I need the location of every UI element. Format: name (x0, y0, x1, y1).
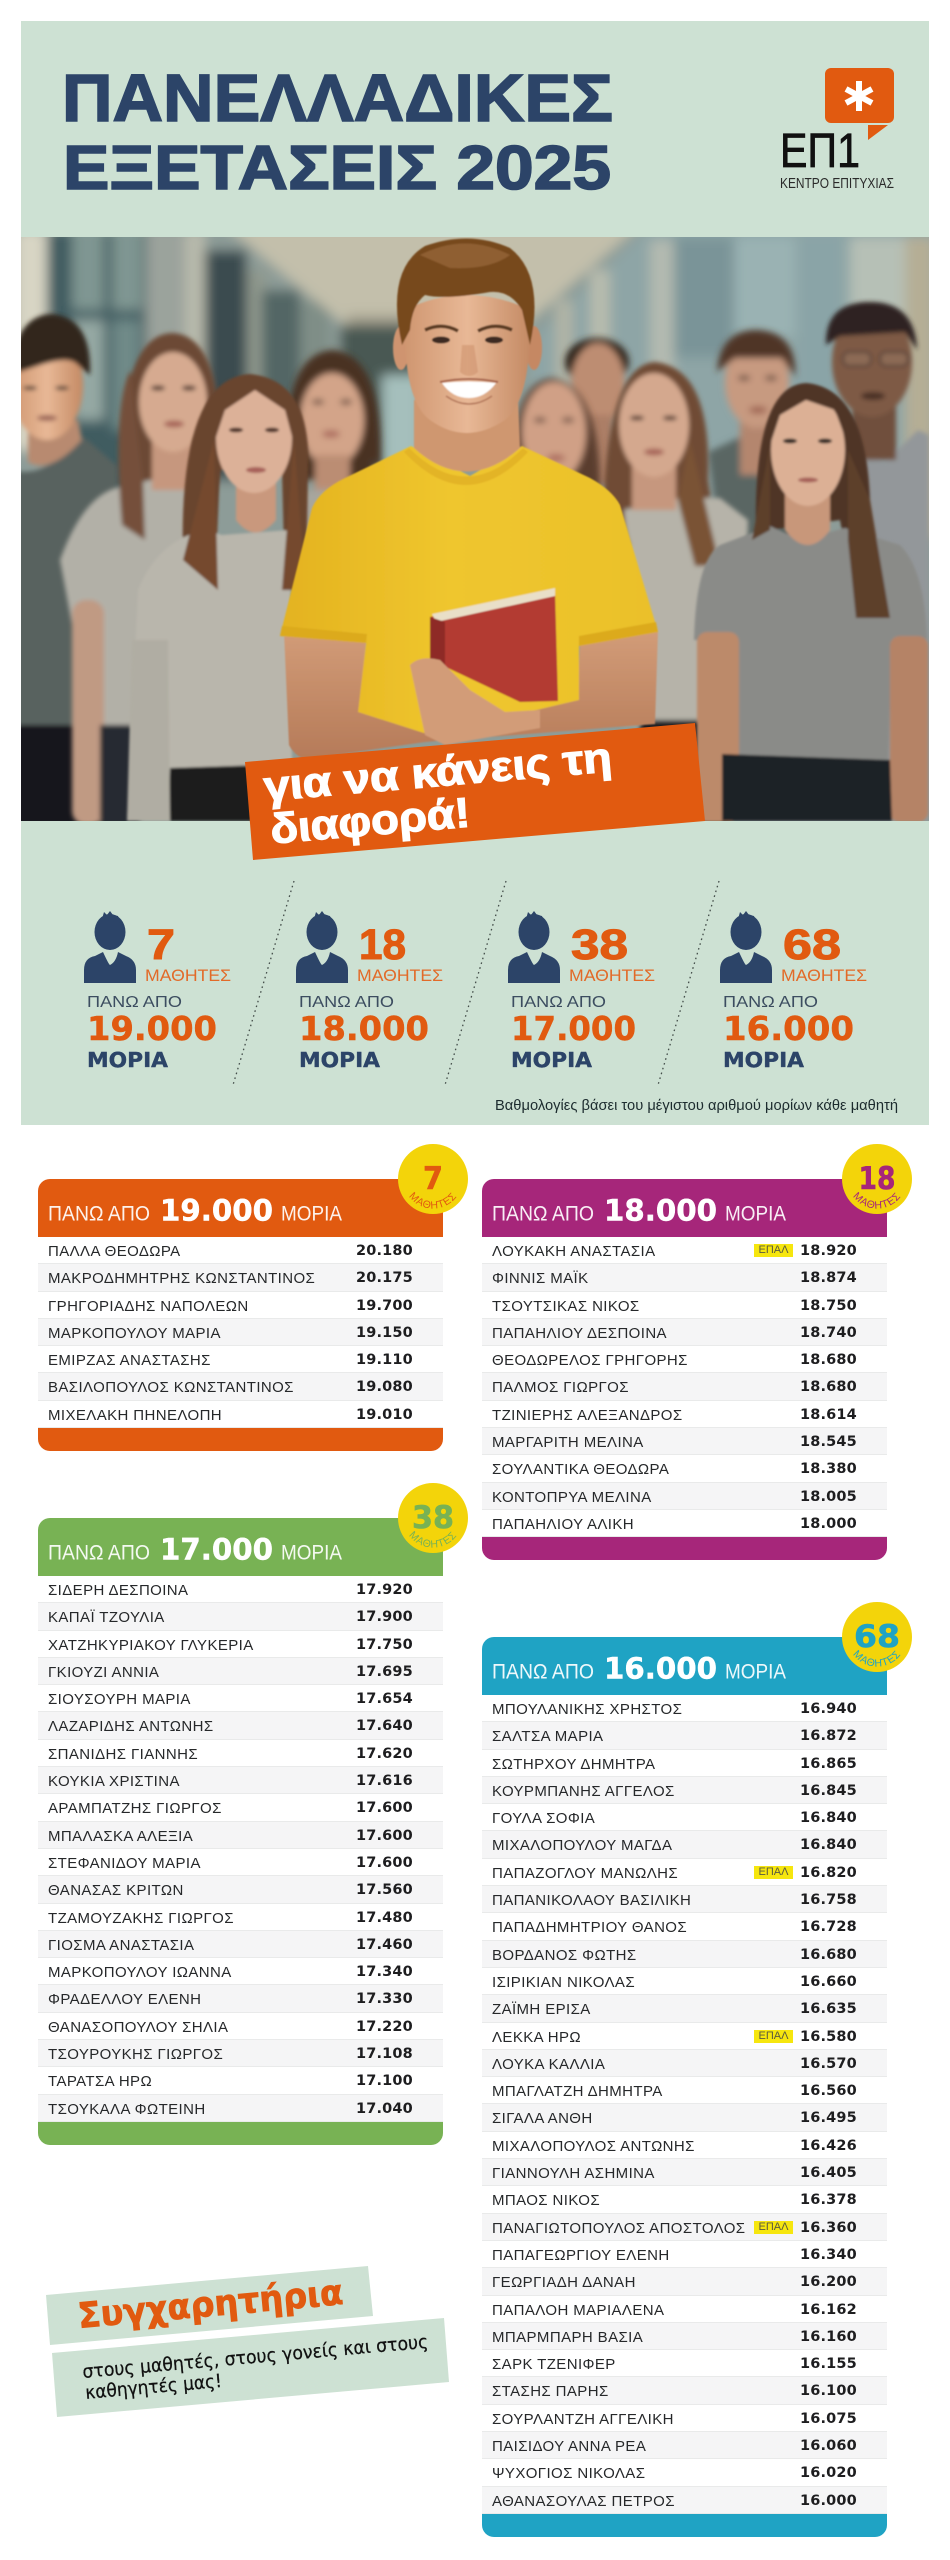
logo: ΕΠ1 Κέντρο Επιτυχίας: ΕΠ1 (780, 125, 860, 178)
stat: 18 students over 18.000: ΠΑΝΩ ΑΠΟ (299, 994, 394, 1011)
table rows: ΑΡΑΜΠΑΤΖΗΣ ΓΙΩΡΓΟΣ (48, 1800, 222, 1817)
table rows: ΜΠΑΓΛΑΤΖΗ ΔΗΜΗΤΡΑ (492, 2083, 663, 2100)
table rows: 17.640 (356, 1718, 413, 1734)
red book (430, 592, 558, 702)
table header (482, 1179, 887, 1237)
table rows: ΜΑΡΓΑΡΙΤΗ ΜΕΛΙΝΑ (492, 1434, 644, 1451)
stat: 18 students over 18.000 (296, 911, 443, 1072)
background student: boy behind right (565, 338, 629, 485)
table rows: 17.600 (356, 1828, 413, 1844)
table rows: ΕΜΙΡΖΑΣ ΑΝΑΣΤΑΣΗΣ (48, 1352, 211, 1369)
photo: students in a school corridor (21, 237, 929, 821)
badge: 7 students: ΜΑΘΗΤΕΣ (409, 1192, 456, 1209)
table rows: ΕΠΑΛ (759, 1244, 788, 1256)
table rows: 17.920 (356, 1582, 413, 1598)
congratulations message (52, 2318, 449, 2417)
smile (442, 382, 496, 398)
badge: 38 students: 38 (412, 1500, 454, 1536)
table rows: 16.340 (800, 2247, 857, 2263)
stat: 38 students over 17.000: 38 (571, 921, 628, 969)
table rows (38, 1582, 443, 2122)
table rows: 18.680 (800, 1379, 857, 1395)
background student: girl behind left (287, 350, 380, 530)
badge: 18 students: ΜΑΘΗΤΕΣ (853, 1192, 900, 1209)
table rows: ΙΣΙΡΙΚΙΑΝ ΝΙΚΟΛΑΣ (492, 1974, 635, 1991)
table rows: ΓΟΥΛΑ ΣΟΦΙΑ (492, 1810, 595, 1827)
table header: ΜΟΡΙΑ (281, 1542, 342, 1564)
congratulations message: στους μαθητές, στους γονείς και στους (82, 2332, 429, 2383)
badge: 18 students: 18 (858, 1161, 896, 1197)
stat: 7 students over 19.000 (84, 911, 231, 1072)
table rows: 16.872 (800, 1728, 857, 1744)
table rows: 17.560 (356, 1882, 413, 1898)
table rows: 16.160 (800, 2329, 857, 2345)
table rows: ΠΑΛΛΑ ΘΕΟΔΩΡΑ (48, 1243, 181, 1260)
stat: 7 students over 19.000: 7 (147, 921, 175, 969)
table rows: 18.380 (800, 1461, 857, 1477)
table rows: ΓΡΗΓΟΡΙΑΔΗΣ ΝΑΠΟΛΕΩΝ (48, 1298, 249, 1315)
table rows: ΓΙΟΣΜΑ ΑΝΑΣΤΑΣΙΑ (48, 1937, 194, 1954)
background student: boy with glasses (826, 302, 929, 821)
table rows: ΕΠΑΛ (759, 2221, 788, 2233)
table rows: 18.740 (800, 1325, 857, 1341)
table rows: ΠΑΠΑΝΙΚΟΛΑΟΥ ΒΑΣΙΛΙΚΗ (492, 1892, 691, 1909)
table rows: 16.940 (800, 1701, 857, 1717)
badge: 68 students: ΜΑΘΗΤΕΣ (853, 1650, 900, 1667)
corridor background (0, 220, 950, 840)
table rows: ΨΥΧΟΓΙΟΣ ΝΙΚΟΛΑΣ (492, 2465, 645, 2482)
table rows: ΒΟΡΔΑΝΟΣ ΦΩΤΗΣ (492, 1947, 637, 1964)
table rows: 16.378 (800, 2192, 857, 2208)
table header (38, 1518, 443, 1576)
table rows: ΦΡΑΔΕΛΛΟΥ ΕΛΕΝΗ (48, 1991, 201, 2008)
stat: 7 students over 19.000: 19.000 (87, 1009, 217, 1048)
table rows: 16.060 (800, 2438, 857, 2454)
banner: για να κάνεις τη διαφορά! (245, 723, 705, 860)
banner: για να κάνεις τη διαφορά!: για να κάνεις τη (262, 733, 613, 810)
table rows: ΖΑΪΜΗ ΕΡΙΣΑ (492, 2001, 591, 2018)
background student: girl in the front right (694, 383, 928, 822)
stat: 18 students over 18.000: ΜΑΘΗΤΕΣ (357, 967, 443, 985)
table rows: 16.570 (800, 2056, 857, 2072)
table rows: 18.000 (800, 1516, 857, 1532)
table rows: 16.360 (800, 2220, 857, 2236)
table rows: ΣΤΕΦΑΝΙΔΟΥ ΜΑΡΙΑ (48, 1855, 201, 1872)
stat: 68 students over 16.000: ΜΟΡΙΑ (723, 1048, 804, 1072)
table rows: ΠΑΙΣΙΔΟΥ ΑΝΝΑ ΡΕΑ (492, 2438, 646, 2455)
background student: girl left (60, 333, 220, 825)
stats row (84, 880, 898, 1114)
table rows: 16.162 (800, 2302, 857, 2318)
panel: stats background (21, 821, 929, 1125)
table rows: 16.635 (800, 2001, 857, 2017)
arms (284, 630, 658, 759)
table header: 17.000 (160, 1532, 273, 1566)
table rows: ΛΕΚΚΑ ΗΡΩ (492, 2029, 581, 2046)
table rows: ΜΑΡΚΟΠΟΥΛΟΥ ΙΩΑΝΝΑ (48, 1964, 232, 1981)
table header: ΠΑΝΩ ΑΠΟ (492, 1202, 594, 1226)
main student: boy in yellow shirt holding a red book (280, 238, 658, 759)
table rows: ΠΑΛΜΟΣ ΓΙΩΡΓΟΣ (492, 1379, 629, 1396)
table rows: ΣΙΔΕΡΗ ΔΕΣΠΟΙΝΑ (48, 1582, 188, 1599)
table rows: ΚΟΝΤΟΠΡΥΑ ΜΕΛΙΝΑ (492, 1489, 652, 1506)
table rows: ΚΟΥΡΜΠΑΝΗΣ ΑΓΓΕΛΟΣ (492, 1783, 675, 1800)
stat: 38 students over 17.000: 17.000 (511, 1009, 636, 1048)
face (405, 295, 530, 433)
table rows: 16.865 (800, 1756, 857, 1772)
table rows: ΠΑΠΑΗΛΙΟΥ ΑΛΙΚΗ (492, 1516, 634, 1533)
stat: 68 students over 16.000: 16.000 (723, 1009, 854, 1048)
badge: 68 students: 68 (854, 1619, 900, 1655)
badge: 38 students: ΜΑΘΗΤΕΣ (409, 1530, 456, 1548)
table rows: ΦΙΝΝΙΣ ΜΑΪΚ (492, 1270, 588, 1287)
stat: 68 students over 16.000 (720, 911, 867, 1072)
table rows: ΤΖΙΝΙΕΡΗΣ ΑΛΕΞΑΝΔΡΟΣ (492, 1407, 683, 1424)
hand (410, 658, 540, 745)
table rows: ΣΑΛΤΣΑ ΜΑΡΙΑ (492, 1728, 603, 1745)
background student: boy right (708, 330, 812, 545)
eyebrows (425, 326, 458, 331)
stat: 38 students over 17.000: ΜΑΘΗΤΕΣ (569, 967, 655, 985)
table rows: ΜΠΟΥΛΑΝΙΚΗΣ ΧΡΗΣΤΟΣ (492, 1701, 682, 1718)
background student: girl right (603, 362, 748, 830)
table rows: 16.580 (800, 2029, 857, 2045)
stat: 38 students over 17.000: ΜΟΡΙΑ (511, 1048, 592, 1072)
table rows: 17.460 (356, 1937, 413, 1953)
badge: 18 students (842, 1144, 912, 1214)
table rows: ΛΟΥΚΑΚΗ ΑΝΑΣΤΑΣΙΑ (492, 1243, 656, 1260)
table rows: ΠΑΠΑΛΟΗ ΜΑΡΙΑΛΕΝΑ (492, 2302, 664, 2319)
table rows: ΜΠΑΛΑΣΚΑ ΑΛΕΞΙΑ (48, 1828, 193, 1845)
table rows: 17.600 (356, 1855, 413, 1871)
badge: 7 students: 7 (423, 1161, 443, 1197)
table rows: 20.175 (356, 1270, 413, 1286)
table header: ΜΟΡΙΑ (281, 1202, 342, 1226)
eyes (432, 336, 450, 344)
callout: congratulations (46, 2266, 449, 2417)
table header: ΜΟΡΙΑ (725, 1202, 786, 1226)
table rows: ΘΑΝΑΣΟΠΟΥΛΟΥ ΣΗΛΙΑ (48, 2019, 228, 2036)
table header: ΠΑΝΩ ΑΠΟ (492, 1660, 594, 1684)
stat: 38 students over 17.000: ΠΑΝΩ ΑΠΟ (511, 994, 606, 1011)
table rows (482, 1701, 887, 2514)
table rows: 16.840 (800, 1810, 857, 1826)
table rows: 16.680 (800, 1947, 857, 1963)
table rows: ΣΙΓΑΛΑ ΑΝΘΗ (492, 2110, 593, 2127)
table rows: ΤΣΟΥΤΣΙΚΑΣ ΝΙΚΟΣ (492, 1298, 640, 1315)
table rows: ΑΘΑΝΑΣΟΥΛΑΣ ΠΕΤΡΟΣ (492, 2493, 675, 2510)
table rows: ΣΟΥΡΛΑΝΤΖΗ ΑΓΓΕΛΙΚΗ (492, 2411, 674, 2428)
table rows: 19.080 (356, 1379, 413, 1395)
table rows: ΛΑΖΑΡΙΔΗΣ ΑΝΤΩΝΗΣ (48, 1718, 214, 1735)
table header: 16.000 (604, 1652, 717, 1686)
table rows: 16.200 (800, 2274, 857, 2290)
table rows: 18.750 (800, 1298, 857, 1314)
table: over 19.000 points (38, 1144, 468, 1451)
table rows: 17.040 (356, 2101, 413, 2117)
congratulations heading: Συγχαρητήρια (76, 2273, 345, 2337)
table header (482, 1637, 887, 1695)
table rows: 17.340 (356, 1964, 413, 1980)
stat: 18 students over 18.000: 18 (359, 921, 406, 969)
table footer (38, 2122, 443, 2145)
table footer (482, 2514, 887, 2537)
table rows: ΜΙΧΕΛΑΚΗ ΠΗΝΕΛΟΠΗ (48, 1407, 222, 1424)
icon: student (296, 911, 348, 983)
table rows: 16.728 (800, 1919, 857, 1935)
badge: 7 students (398, 1144, 468, 1214)
table: over 18.000 points (482, 1144, 912, 1560)
stat: 68 students over 16.000: ΜΑΘΗΤΕΣ (781, 967, 867, 985)
table rows: 17.616 (356, 1773, 413, 1789)
table header: 19.000 (160, 1194, 273, 1228)
table rows: 17.330 (356, 1991, 413, 2007)
table header: ΠΑΝΩ ΑΠΟ (48, 1202, 150, 1226)
table rows: ΤΣΟΥΚΑΛΑ ΦΩΤΕΙΝΗ (48, 2101, 206, 2118)
stat: 18 students over 18.000: 18.000 (299, 1009, 429, 1048)
icon: student (720, 911, 772, 983)
table rows: ΓΚΙΟΥΖΙ ΑΝΝΙΑ (48, 1664, 159, 1681)
table rows: 16.820 (800, 1865, 857, 1881)
table rows: 19.010 (356, 1407, 413, 1423)
stat: 7 students over 19.000: ΜΑΘΗΤΕΣ (145, 967, 231, 985)
table rows: ΜΙΧΑΛΟΠΟΥΛΟΥ ΜΑΓΔΑ (492, 1837, 672, 1854)
table header (38, 1179, 443, 1237)
table rows: ΠΑΝΑΓΙΩΤΟΠΟΥΛΟΣ ΑΠΟΣΤΟΛΟΣ (492, 2220, 745, 2237)
title: ΕΞΕΤΑΣΕΙΣ 2025 (63, 134, 611, 203)
table rows: ΓΙΑΝΝΟΥΛΗ ΑΣΗΜΙΝΑ (492, 2165, 655, 2182)
table header: ΜΟΡΙΑ (725, 1660, 786, 1684)
table rows: 18.680 (800, 1352, 857, 1368)
table rows: 16.000 (800, 2493, 857, 2509)
table rows: 17.220 (356, 2019, 413, 2035)
table rows: ΛΟΥΚΑ ΚΑΛΛΙΑ (492, 2056, 605, 2073)
table footer (482, 1537, 887, 1560)
table rows: 16.660 (800, 1974, 857, 1990)
icon: student (84, 911, 136, 983)
table rows: 17.750 (356, 1637, 413, 1653)
table rows: 19.110 (356, 1352, 413, 1368)
table rows: ΚΟΥΚΙΑ ΧΡΙΣΤΙΝΑ (48, 1773, 180, 1790)
table: over 17.000 points (38, 1483, 468, 2145)
hair (397, 238, 534, 345)
table rows: ΕΠΑΛ (759, 1866, 788, 1878)
table rows: ΜΑΡΚΟΠΟΥΛΟΥ ΜΑΡΙΑ (48, 1325, 221, 1342)
neck (414, 400, 520, 472)
table rows: 17.600 (356, 1800, 413, 1816)
table rows: 16.845 (800, 1783, 857, 1799)
table rows: 16.426 (800, 2138, 857, 2154)
table rows (482, 1243, 887, 1537)
table rows: ΒΑΣΙΛΟΠΟΥΛΟΣ ΚΩΝΣΤΑΝΤΙΝΟΣ (48, 1379, 294, 1396)
table rows: 17.100 (356, 2073, 413, 2089)
table rows: 16.560 (800, 2083, 857, 2099)
table rows: 19.700 (356, 1298, 413, 1314)
stat: 7 students over 19.000: ΜΟΡΙΑ (87, 1048, 168, 1072)
table rows: ΜΑΚΡΟΔΗΜΗΤΡΗΣ ΚΩΝΣΤΑΝΤΙΝΟΣ (48, 1270, 315, 1287)
stat: 68 students over 16.000: ΠΑΝΩ ΑΠΟ (723, 994, 818, 1011)
table rows: ΣΤΑΣΗΣ ΠΑΡΗΣ (492, 2383, 609, 2400)
stat: 38 students over 17.000 (508, 911, 655, 1072)
table rows: ΠΑΠΑΗΛΙΟΥ ΔΕΣΠΟΙΝΑ (492, 1325, 667, 1342)
logo: ΕΠ1 Κέντρο Επιτυχίας (780, 68, 894, 192)
table rows: ΠΑΠΑΓΕΩΡΓΙΟΥ ΕΛΕΝΗ (492, 2247, 670, 2264)
icon: student (508, 911, 560, 983)
table rows: 16.155 (800, 2356, 857, 2372)
footnote: Βαθμολογίες βάσει του μέγιστου αριθμού μορίων κάθε μαθητή (495, 1097, 898, 1114)
table rows: 17.108 (356, 2046, 413, 2062)
panel: top header background (21, 21, 929, 237)
table header: ΠΑΝΩ ΑΠΟ (48, 1542, 150, 1564)
background student: girl in the front left (127, 374, 308, 821)
ears (393, 326, 409, 370)
title: ΠΑΝΕΛΛΑΔΙΚΕΣ (62, 61, 613, 136)
table footer (38, 1428, 443, 1451)
table rows: 17.620 (356, 1746, 413, 1762)
nose (460, 345, 478, 376)
table rows: 17.654 (356, 1691, 413, 1707)
table rows: ΣΑΡΚ ΤΖΕΝΙΦΕΡ (492, 2356, 616, 2373)
table rows: 18.545 (800, 1434, 857, 1450)
table rows: ΤΣΟΥΡΟΥΚΗΣ ΓΙΩΡΓΟΣ (48, 2046, 223, 2063)
table rows: ΤΖΑΜΟΥΖΑΚΗΣ ΓΙΩΡΓΟΣ (48, 1910, 234, 1927)
table rows: 16.840 (800, 1837, 857, 1853)
table rows (38, 1243, 443, 1428)
table rows: 17.480 (356, 1910, 413, 1926)
table rows: ΤΑΡΑΤΣΑ ΗΡΩ (48, 2073, 152, 2090)
table rows: 18.920 (800, 1243, 857, 1259)
table rows: 16.758 (800, 1892, 857, 1908)
badge: 38 students (398, 1483, 468, 1553)
table rows: 20.180 (356, 1243, 413, 1259)
banner: για να κάνεις τη διαφορά!: διαφορά! (268, 789, 472, 853)
table rows: 18.874 (800, 1270, 857, 1286)
yellow shirt (280, 446, 658, 735)
table rows: 16.020 (800, 2465, 857, 2481)
table rows: 18.005 (800, 1489, 857, 1505)
table rows: ΜΠΑΟΣ ΝΙΚΟΣ (492, 2192, 600, 2209)
table rows: 16.075 (800, 2411, 857, 2427)
background student: boy far left (10, 314, 118, 825)
stat: 18 students over 18.000: ΜΟΡΙΑ (299, 1048, 380, 1072)
table rows: ΣΠΑΝΙΔΗΣ ΓΙΑΝΝΗΣ (48, 1746, 198, 1763)
table rows: ΘΑΝΑΣΑΣ ΚΡΙΤΩΝ (48, 1882, 184, 1899)
table rows: ΣΟΥΛΑΝΤΙΚΑ ΘΕΟΔΩΡΑ (492, 1461, 669, 1478)
badge: 68 students (842, 1602, 912, 1672)
table rows: ΠΑΠΑΔΗΜΗΤΡΙΟΥ ΘΑΝΟΣ (492, 1919, 687, 1936)
table rows: ΣΙΟΥΣΟΥΡΗ ΜΑΡΙΑ (48, 1691, 191, 1708)
table header: 18.000 (604, 1194, 717, 1228)
table rows: ΜΙΧΑΛΟΠΟΥΛΟΣ ΑΝΤΩΝΗΣ (492, 2138, 695, 2155)
table rows: ΘΕΟΔΩΡΕΛΟΣ ΓΡΗΓΟΡΗΣ (492, 1352, 688, 1369)
table rows: ΓΕΩΡΓΙΑΔΗ ΔΑΝΑΗ (492, 2274, 636, 2291)
title (62, 61, 613, 203)
table rows: 19.150 (356, 1325, 413, 1341)
table rows: ΣΩΤΗΡΧΟΥ ΔΗΜΗΤΡΑ (492, 1756, 655, 1773)
table rows: ΠΑΠΑΖΟΓΛΟΥ ΜΑΝΩΛΗΣ (492, 1865, 678, 1882)
table rows: 16.495 (800, 2110, 857, 2126)
table: over 16.000 points (482, 1602, 912, 2537)
stat: 7 students over 19.000: ΠΑΝΩ ΑΠΟ (87, 994, 182, 1011)
table rows: ΜΠΑΡΜΠΑΡΗ ΒΑΣΙΑ (492, 2329, 643, 2346)
table rows: 17.695 (356, 1664, 413, 1680)
stat: 68 students over 16.000: 68 (783, 921, 841, 969)
background student: girl behind centre-right (512, 378, 600, 510)
table rows: ΚΑΠΑΪ ΤΖΟΥΛΙΑ (48, 1609, 165, 1626)
table rows: ΕΠΑΛ (759, 2030, 788, 2042)
table rows: 18.614 (800, 1407, 857, 1423)
table rows: ΧΑΤΖΗΚΥΡΙΑΚΟΥ ΓΛΥΚΕΡΙΑ (48, 1637, 254, 1654)
table rows: 16.405 (800, 2165, 857, 2181)
congratulations message: καθηγητές μας! (84, 2371, 223, 2404)
table rows: 17.900 (356, 1609, 413, 1625)
table rows: 16.100 (800, 2383, 857, 2399)
